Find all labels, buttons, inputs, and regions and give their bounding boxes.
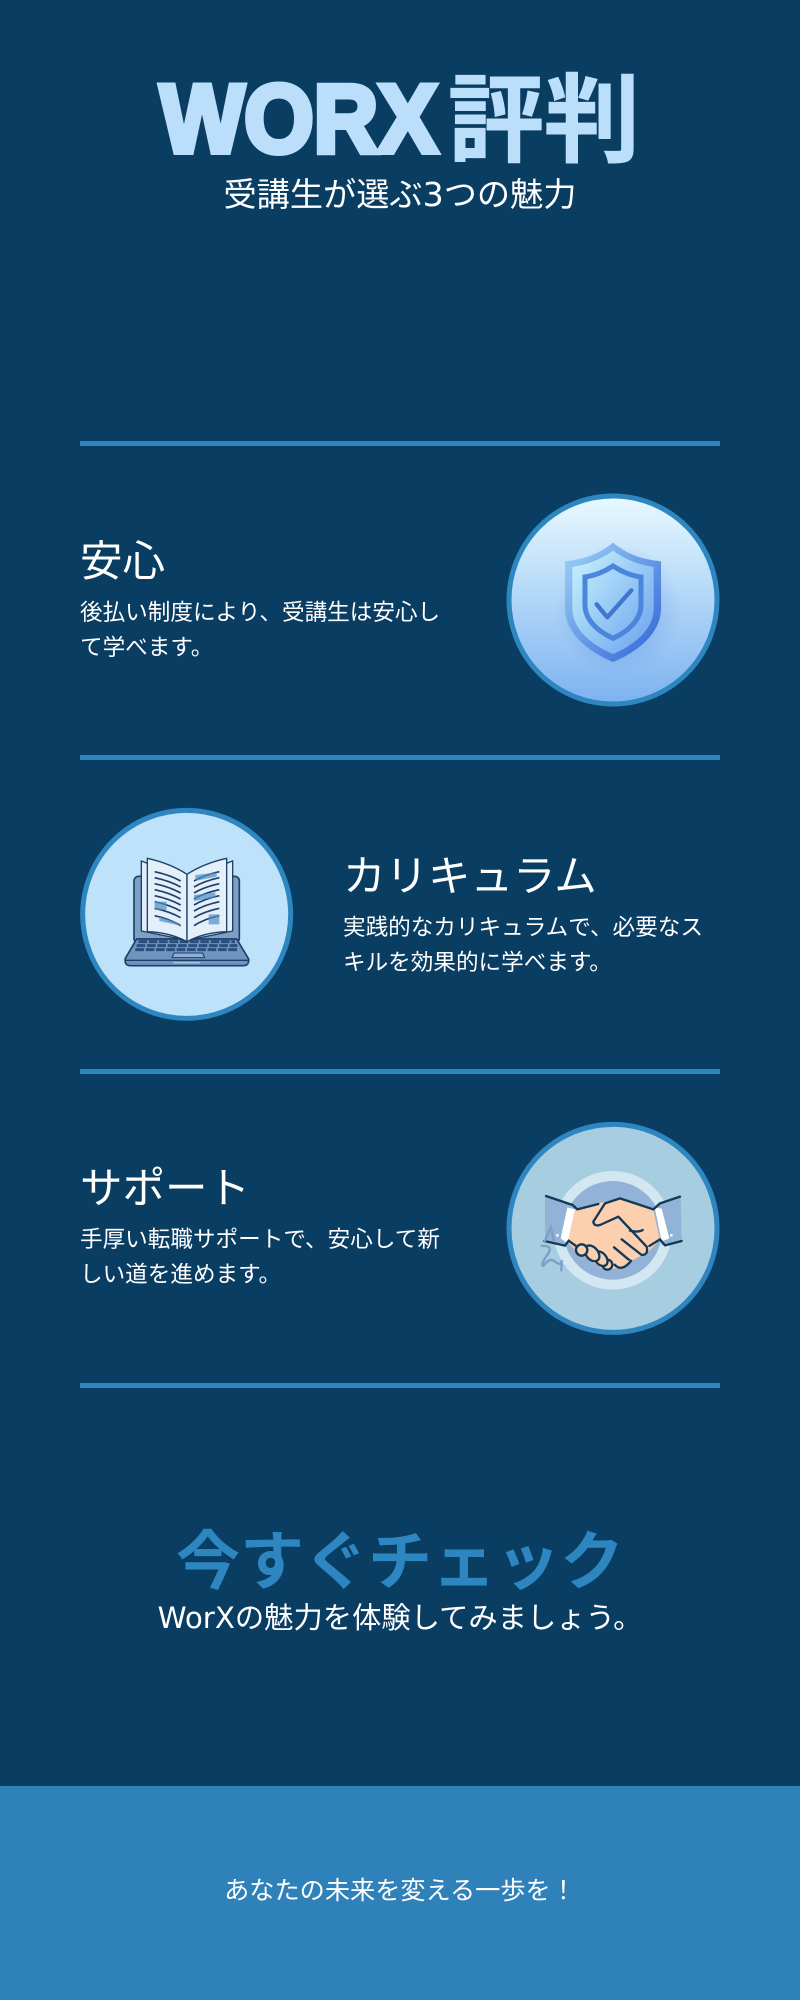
text: サポート <box>80 1227 440 1288</box>
panel: 安心 <box>80 494 720 706</box>
heading: カリキュラム: カリキュラム <box>343 853 597 902</box>
call to action heading: 今すぐチェック <box>176 1526 624 1600</box>
text: カリキュラム <box>343 915 703 976</box>
call to action text: WorXの魅力を体験してみましょう。 <box>158 1601 642 1635</box>
text: カリキュラム: 実践的なカリキュラムで、必要なス <box>343 915 703 941</box>
panel: サポート <box>80 1122 720 1335</box>
footer <box>0 1786 800 2000</box>
icon: handshake <box>506 1122 720 1335</box>
heading: 安心: 安心 <box>80 538 165 587</box>
text: 安心 <box>80 600 440 660</box>
heading: サポート: サポート <box>80 1165 250 1214</box>
text: サポート: しい道を進めます。 <box>80 1262 281 1288</box>
panel: カリキュラム <box>80 808 703 1021</box>
text: 安心: て学べます。 <box>80 634 213 660</box>
text: サポート: 手厚い転職サポートで、安心して新 <box>80 1227 440 1253</box>
text: 安心: 後払い制度により、受講生は安心し <box>80 600 440 626</box>
icon: book on laptop <box>80 808 294 1021</box>
title <box>156 50 640 182</box>
subtitle: 受講生が選ぶ3つの魅力 <box>224 175 576 214</box>
title: WORX <box>160 65 438 173</box>
text: カリキュラム: キルを効果的に学べます。 <box>343 950 612 976</box>
footer: あなたの未来を変える一歩を！ <box>224 1876 576 1905</box>
icon: shield <box>506 494 720 706</box>
